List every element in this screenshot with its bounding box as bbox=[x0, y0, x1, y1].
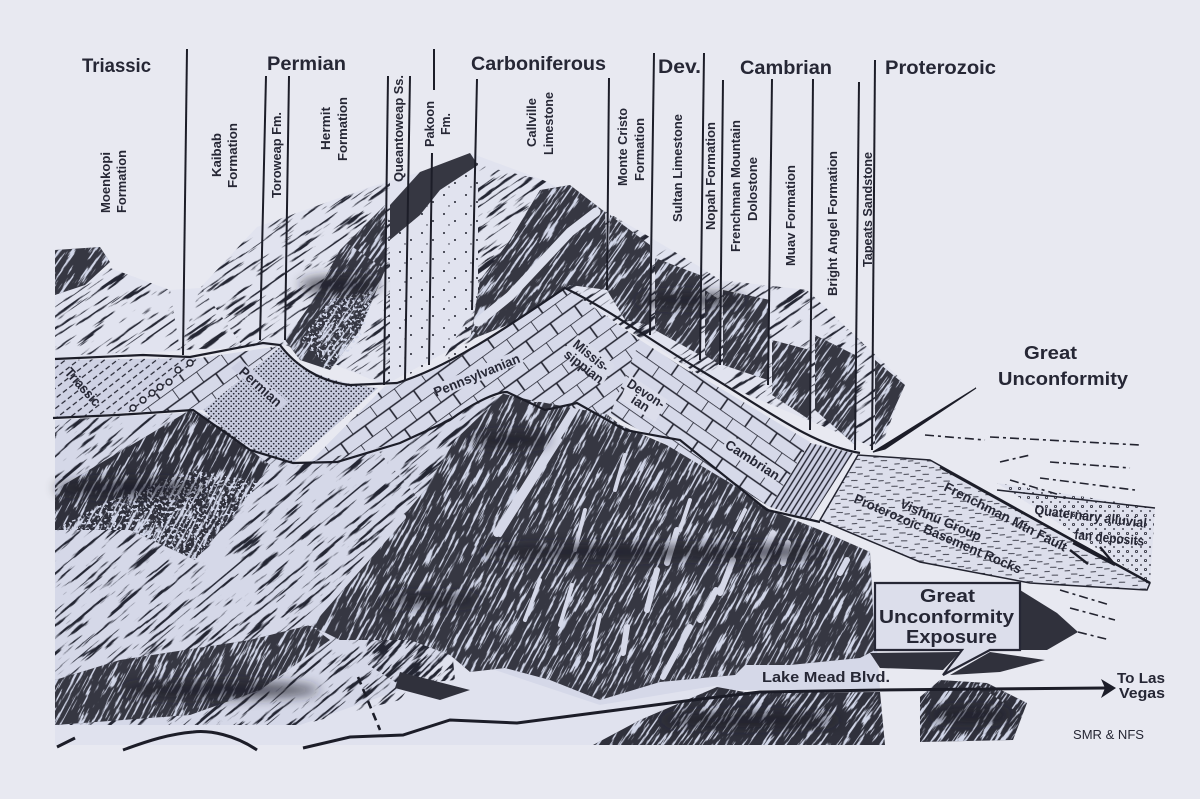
roads: Lake Mead Blvd with arrow bbox=[57, 669, 1116, 750]
formation names: Monte Cristo bbox=[616, 108, 630, 186]
formation names: Queantoweap Ss. bbox=[392, 75, 406, 182]
foreground denser slope texture bbox=[360, 610, 455, 685]
formation names: Tapeats Sandstone bbox=[861, 152, 875, 267]
formation names: Nopah Formation bbox=[704, 122, 718, 230]
formation names bbox=[99, 75, 875, 296]
lower mountain foreground base bbox=[55, 395, 880, 745]
period headings: Proterozoic bbox=[885, 58, 996, 79]
formation names: Sultan Limestone bbox=[671, 114, 685, 222]
Quaternary alluvial fan deposits bbox=[940, 467, 1155, 583]
upper mountain ridge backdrop bbox=[55, 153, 905, 450]
rock layer: Mississippian: Missis- bbox=[570, 337, 612, 375]
label: To Las Vegas bbox=[1117, 670, 1165, 702]
callout: Great Unconformity: Great bbox=[1024, 342, 1077, 363]
callout box: Great Unconformity Exposure bbox=[875, 583, 1020, 675]
Quaternary alluvial fan deposits: fan deposits bbox=[1074, 527, 1145, 549]
formation names: Formation bbox=[115, 150, 129, 213]
period headings: Permian bbox=[267, 54, 346, 75]
formation names: Limestone bbox=[542, 92, 556, 155]
formation names: Dolostone bbox=[746, 157, 760, 221]
formation names: Bright Angel Formation bbox=[826, 151, 840, 296]
formation names: Formation bbox=[633, 118, 647, 181]
formation names: Fm. bbox=[439, 113, 453, 135]
callout box: Great Unconformity Exposure: Exposure bbox=[906, 626, 997, 647]
roads: Lake Mead Blvd with arrow: Lake Mead Blvd. bbox=[762, 669, 890, 686]
formation names: Moenkopi bbox=[99, 152, 113, 213]
white streaks in dark rock bbox=[50, 280, 1027, 745]
label: To Las Vegas: To Las bbox=[1117, 670, 1165, 687]
rock layer: Triassic bbox=[55, 358, 200, 418]
photo crease dark smears bbox=[55, 277, 1010, 727]
Proterozoic basement rocks: Frenchman Mtn Fault bbox=[942, 479, 1070, 555]
formation names: Callville bbox=[525, 98, 539, 147]
formation names: Kaibab bbox=[210, 133, 224, 177]
rock layer: Devonian: ian bbox=[628, 392, 652, 415]
formation names: Formation bbox=[336, 97, 350, 161]
layer boundary lines bbox=[53, 288, 860, 522]
Proterozoic basement rocks: Vishnu Group bbox=[898, 496, 984, 544]
period headings: Triassic bbox=[82, 56, 151, 77]
Proterozoic basement rocks bbox=[820, 455, 1150, 590]
rock layer: Mississippian: sippian bbox=[561, 347, 607, 387]
Quaternary alluvial fan deposits: Quaternary alluvial bbox=[1034, 502, 1148, 531]
formation names: Hermit bbox=[319, 106, 333, 150]
rock layer: Devonian bbox=[610, 340, 690, 438]
period headings bbox=[82, 54, 996, 79]
rock layer: Permian bbox=[203, 347, 378, 463]
rock layer: limestone with conglomerate bbox=[130, 346, 280, 412]
scattered desert sketch marks bbox=[925, 435, 1140, 640]
foreground light slopes with fine gully lines bbox=[55, 395, 590, 725]
formation names: Muav Formation bbox=[784, 165, 798, 266]
rock layer: Cambrian bbox=[655, 370, 853, 520]
period headings: Carboniferous bbox=[471, 54, 606, 75]
foreground dark rock masses bbox=[55, 390, 1078, 745]
Proterozoic basement rocks: Proterozoic Basement Rocks bbox=[852, 491, 1024, 577]
callout box: Great Unconformity Exposure: Great bbox=[920, 585, 975, 606]
formation names: Formation bbox=[226, 123, 240, 188]
pale plain along the bottom bbox=[55, 655, 720, 745]
rock layer: Pennsylvanian bbox=[310, 288, 615, 462]
period headings: Dev. bbox=[658, 57, 701, 78]
formation names: Frenchman Mountain bbox=[729, 120, 743, 252]
formation divider lines bbox=[183, 49, 875, 450]
formation names: Toroweap Fm. bbox=[270, 112, 284, 198]
rock layer: Permian: Permian bbox=[236, 363, 285, 410]
callout: Great Unconformity bbox=[873, 342, 1129, 452]
rock layer: Triassic: Triassic bbox=[62, 364, 105, 409]
label: To Las Vegas: Vegas bbox=[1119, 685, 1165, 702]
callout: Great Unconformity: Unconformity bbox=[998, 368, 1129, 389]
rock layer: Pennsylvanian: Pennsylvanian bbox=[431, 351, 522, 400]
callout box: Great Unconformity Exposure: Unconformity bbox=[879, 606, 1015, 627]
rock layer: Devonian: Devon- bbox=[624, 376, 668, 411]
rock layer: Mississippian bbox=[530, 294, 640, 415]
period headings: Cambrian bbox=[740, 58, 832, 79]
formation names: Pakoon bbox=[423, 101, 437, 147]
credit: SMR & NFS: SMR & NFS bbox=[1073, 727, 1144, 742]
rock layer: Cambrian: Cambrian bbox=[722, 437, 783, 483]
